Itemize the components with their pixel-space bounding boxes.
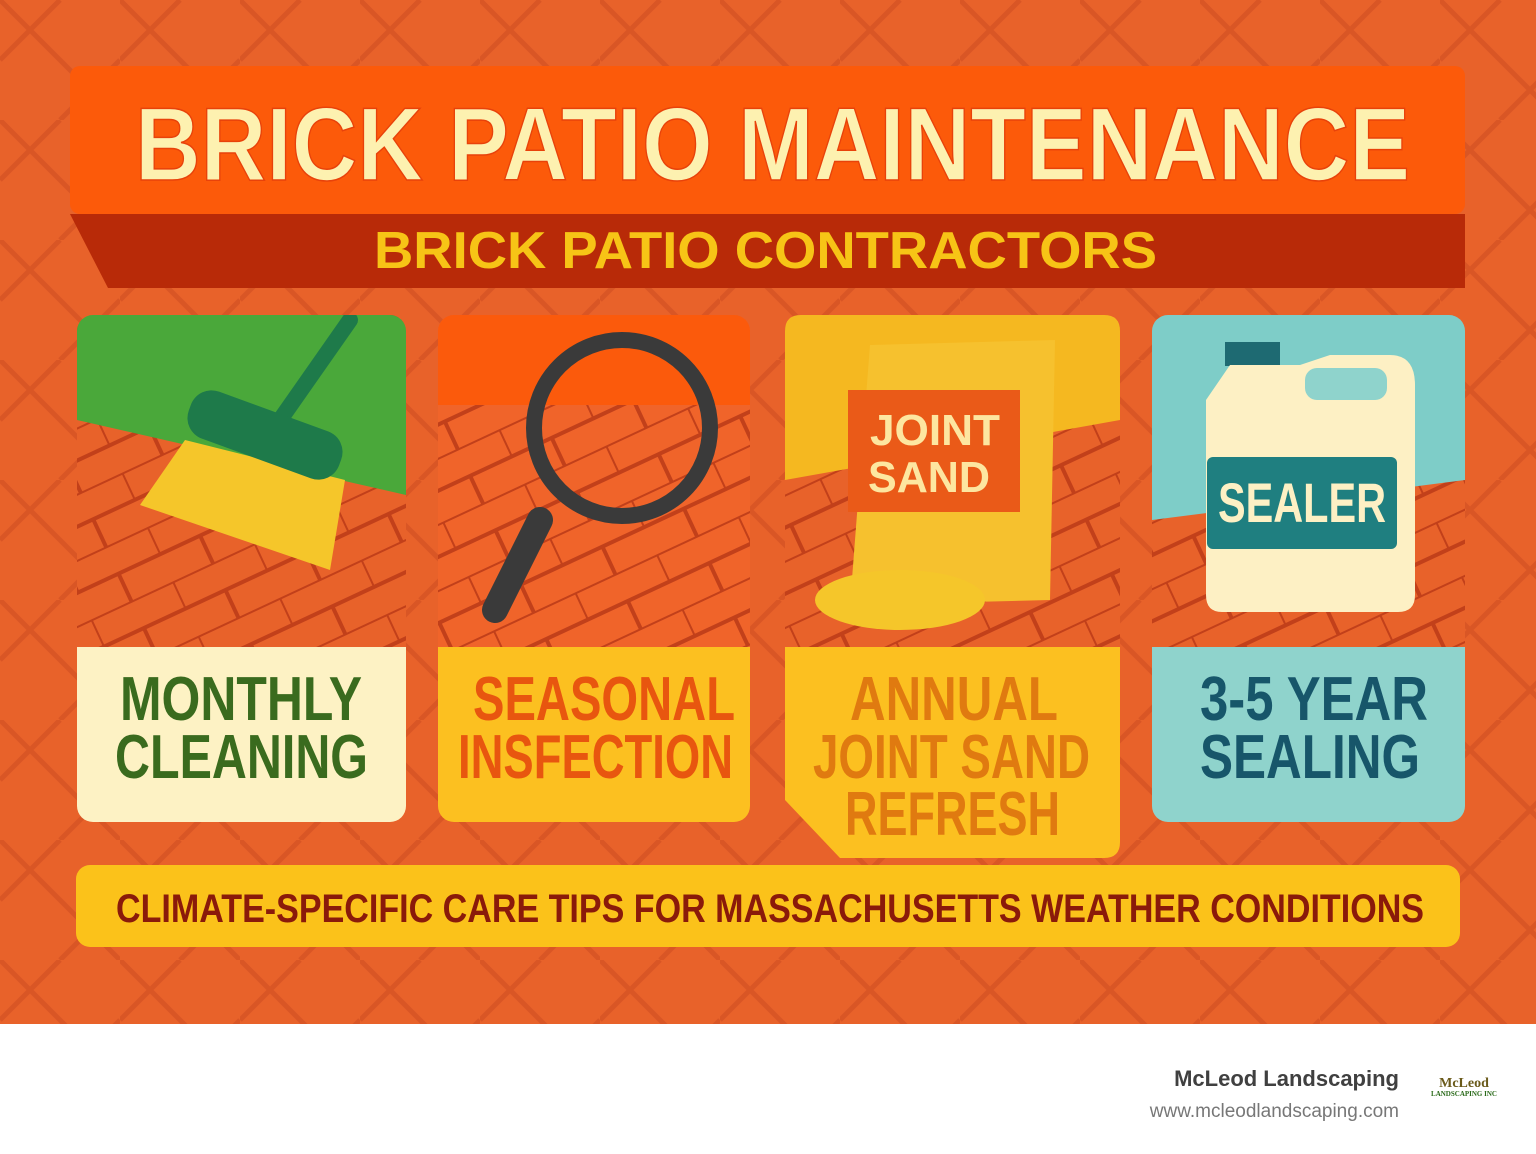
label: annual joint sand refresh — [813, 665, 1090, 849]
logo — [1431, 1076, 1497, 1098]
logo: McLeod — [1439, 1076, 1489, 1091]
brand text — [1149, 1066, 1399, 1122]
label: annual joint sand refresh: JOINT SAND — [813, 723, 1090, 792]
icon: broom — [140, 320, 350, 570]
icon: magnifying glass — [495, 340, 710, 610]
panel: seasonal inspection — [438, 315, 750, 822]
label: monthly cleaning: CLEANING — [115, 723, 368, 792]
label: seasonal inspection: SEASONAL — [473, 665, 735, 734]
label: annual joint sand refresh: REFRESH — [845, 780, 1060, 849]
brand text: McLeod Landscaping — [1174, 1066, 1399, 1091]
panel: monthly cleaning — [77, 315, 406, 822]
label: sealing — [1200, 665, 1428, 792]
label: sealing: SEALING — [1200, 723, 1420, 792]
label: annual joint sand refresh: ANNUAL — [850, 665, 1058, 734]
panel: sealing — [1152, 315, 1465, 822]
icon: sealer jug — [1206, 342, 1415, 612]
brand text: www.mcleodlandscaping.com — [1149, 1101, 1399, 1122]
panel: annual joint sand — [785, 315, 1120, 858]
icon: joint sand bag — [815, 340, 1055, 630]
label: seasonal inspection: INSFECTION — [458, 723, 733, 792]
label: seasonal inspection — [458, 665, 735, 792]
label: sealing: 3-5 YEAR — [1200, 665, 1428, 734]
subtitle: BRICK PATIO CONTRACTORS — [374, 222, 1157, 280]
label: monthly cleaning — [115, 665, 368, 792]
label: monthly cleaning: MONTHLY — [120, 665, 362, 734]
icon: joint sand bag: JOINT — [870, 406, 1000, 455]
footer banner — [76, 865, 1460, 947]
icon: sealer jug: SEALER — [1218, 471, 1386, 534]
logo: LANDSCAPING INC — [1431, 1090, 1497, 1098]
title banner — [70, 66, 1465, 288]
icon: joint sand bag: SAND — [868, 453, 990, 502]
